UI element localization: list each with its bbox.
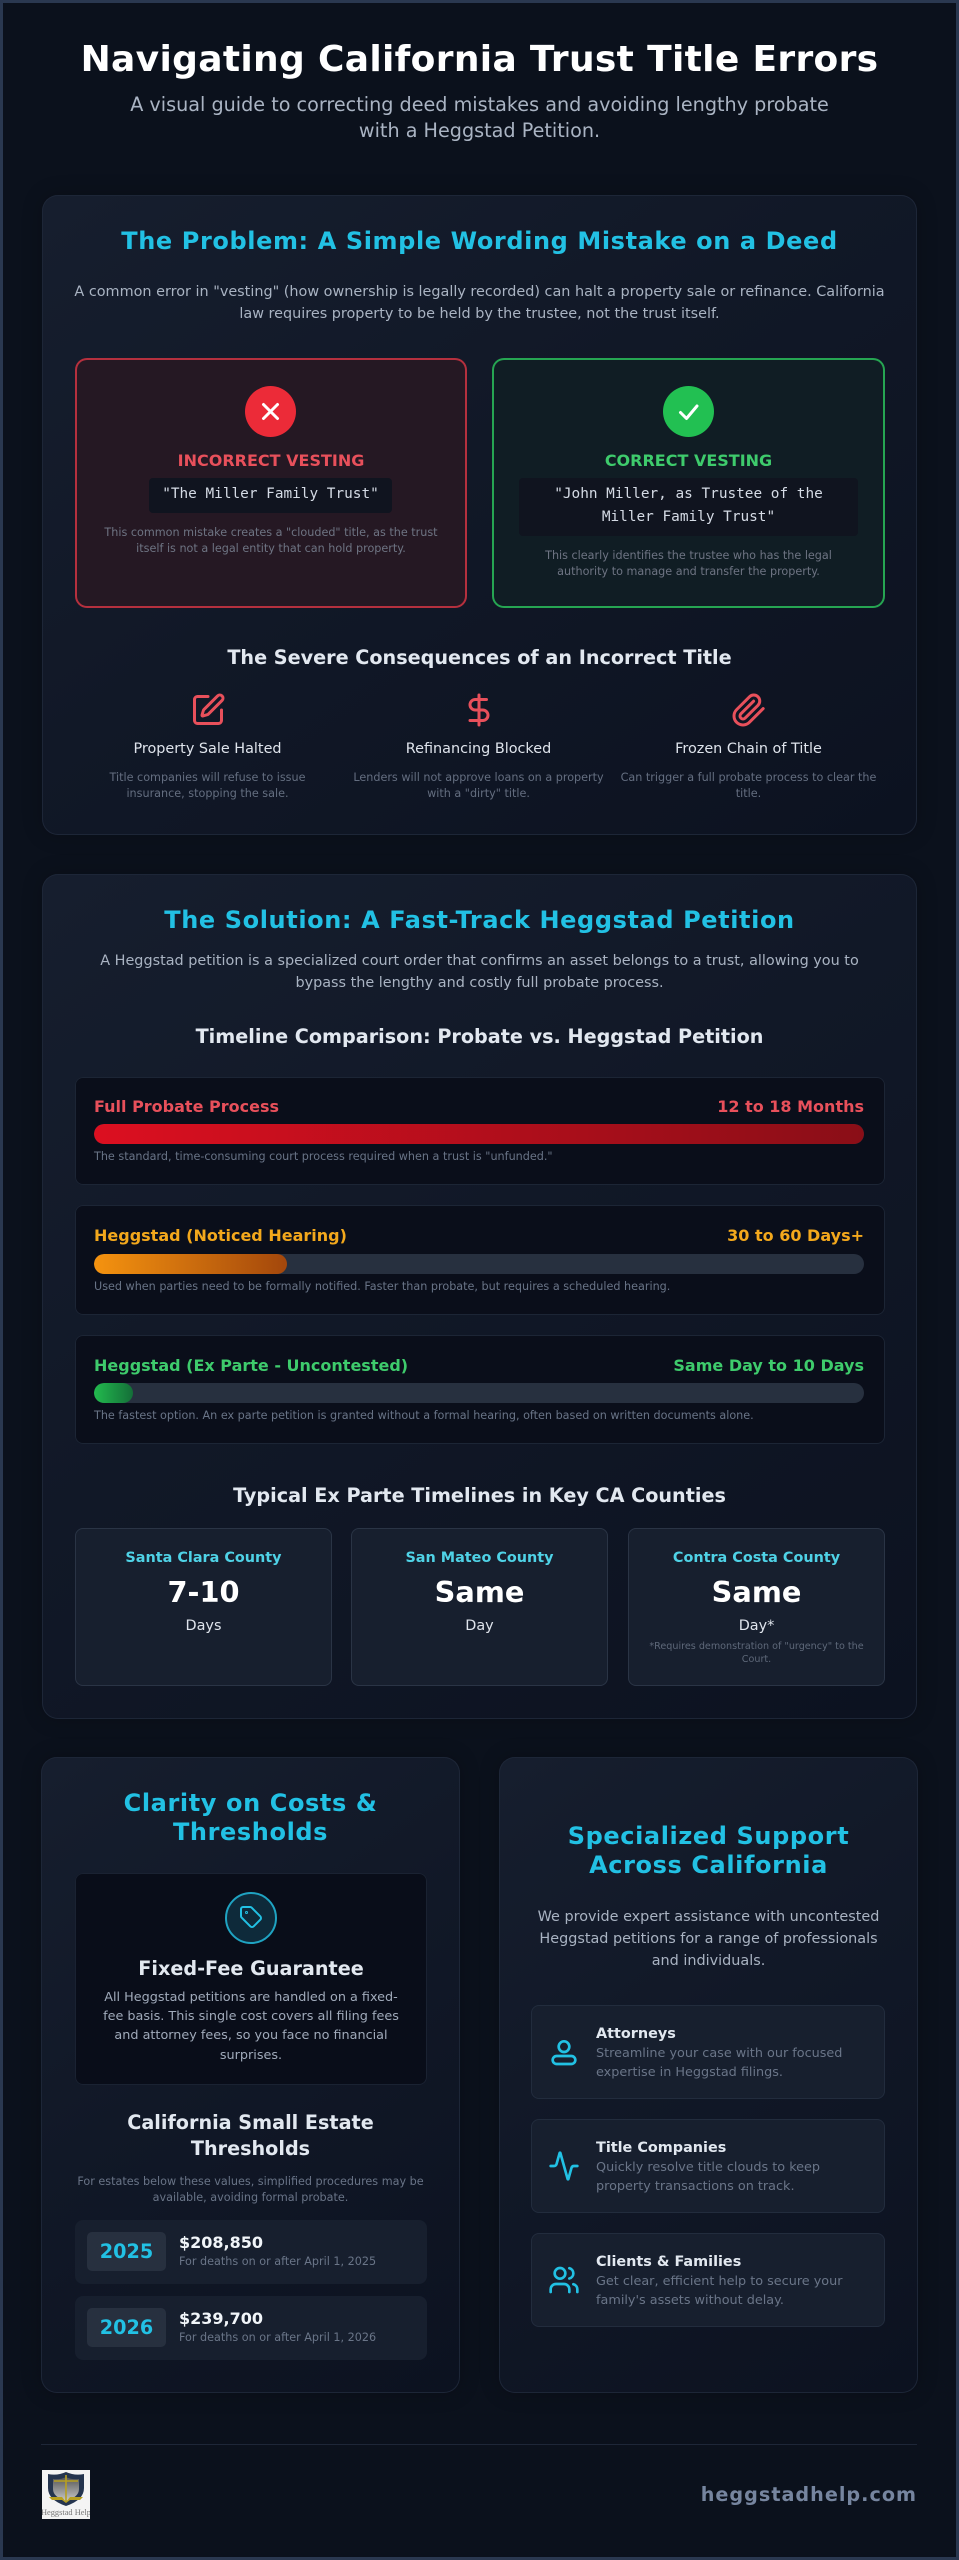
thresholds note: For estates below these values, simplified procedures may be (77, 2175, 424, 2188)
card: incorrect vesting (75, 358, 467, 608)
year badge (87, 2232, 166, 2271)
support description: Heggstad petitions for a range of professionals (539, 1931, 878, 1947)
audience: title companies (531, 2119, 885, 2213)
fixed-fee text: and attorney fees, so you face no financial (114, 2028, 388, 2043)
consequence text: title. (736, 787, 761, 800)
icon: paperclip (732, 694, 765, 726)
support description: We provide expert assistance with uncontested (538, 1909, 879, 1925)
county unit: Day (465, 1618, 494, 1634)
county name: Santa Clara County (125, 1550, 282, 1566)
code: incorrect title (149, 478, 392, 513)
note: The fastest option. An ex parte petition is granted without a formal hearing, often based on written documents alone. (94, 1409, 754, 1422)
audience text: family's assets without delay. (596, 2293, 784, 2308)
code: correct title: "John Miller, as Trustee of the (554, 486, 823, 502)
icon: users (549, 2266, 579, 2294)
consequence text: with a "dirty" title. (427, 787, 530, 800)
audience title: Attorneys (596, 2026, 676, 2042)
heading: consequences: The Severe Consequences of an Incorrect Title (227, 646, 732, 669)
timeline: full probate (75, 1077, 885, 1185)
subtitle: A visual guide to correcting deed mistakes and avoiding lengthy probate (130, 93, 829, 116)
icon: red x (245, 386, 296, 437)
threshold 2025 (75, 2220, 427, 2284)
bar (94, 1124, 864, 1144)
effective date: For deaths on or after April 1, 2026 (179, 2331, 376, 2344)
heading: clarity on costs: Thresholds (173, 1818, 328, 1846)
consequence heading: Property Sale Halted (133, 741, 282, 757)
solution description (100, 953, 859, 991)
label: Heggstad (Noticed Hearing) (94, 1226, 347, 1245)
fixed-fee text: surprises. (220, 2048, 282, 2063)
label: correct vesting: CORRECT VESTING (605, 451, 772, 470)
heading: specialized support (568, 1822, 849, 1879)
support description: and individuals. (652, 1953, 765, 1969)
county: san mateo (351, 1528, 608, 1686)
bar (94, 1383, 864, 1403)
consequence text: Lenders will not approve loans on a property (353, 771, 604, 784)
audience text: Get clear, efficient help to secure your (596, 2274, 843, 2289)
thresholds note: available, avoiding formal probate. (153, 2191, 348, 2204)
icon: pen square (193, 694, 224, 725)
heading: specialized support: Across California (589, 1851, 828, 1879)
panel: the solution (42, 874, 917, 1719)
effective date: For deaths on or after April 1, 2025 (179, 2255, 376, 2268)
correct explanation: authority to manage and transfer the property. (557, 565, 820, 578)
problem description: law requires property to be held by the trustee, not the trust itself. (239, 306, 720, 322)
consequence text: Can trigger a full probate process to clear the (621, 771, 876, 784)
title: Navigating California Trust Title Errors (81, 39, 878, 80)
consequence text (353, 771, 604, 800)
incorrect explanation: itself is not a legal entity that can hold property. (136, 542, 406, 555)
duration: 30 to 60 Days+ (727, 1226, 864, 1245)
audience text: Quickly resolve title clouds to keep (596, 2160, 820, 2175)
label: incorrect vesting: INCORRECT VESTING (178, 451, 364, 470)
fixed-fee heading: Fixed-Fee Guarantee (138, 1957, 364, 1980)
county name: San Mateo County (405, 1550, 554, 1566)
logo (42, 2470, 90, 2519)
heading: the solution: The Solution: A Fast-Track Heggstad Petition (164, 906, 795, 934)
audience text: expertise in Heggstad filings. (596, 2065, 783, 2080)
fixed-fee text: All Heggstad petitions are handled on a fixed- (104, 1990, 398, 2005)
county value: Same (712, 1575, 801, 1609)
icon: green check (663, 386, 714, 437)
audience text: property transactions on track. (596, 2179, 795, 2194)
icon: user (551, 2040, 577, 2066)
heading: small estate thresholds: Thresholds (191, 2137, 310, 2160)
year badge (87, 2308, 166, 2347)
county footnote: *Requires demonstration of "urgency" to the (649, 1641, 864, 1652)
audience text (596, 2160, 820, 2194)
audience text: Streamline your case with our focused (596, 2046, 842, 2061)
panel: specialized support (499, 1757, 918, 2393)
code: correct title: Miller Family Trust" (602, 509, 775, 525)
consequence: frozen chain of title (621, 694, 876, 800)
consequence text: insurance, stopping the sale. (126, 787, 289, 800)
year badge: 2025 (100, 2240, 153, 2263)
county unit: Days (186, 1618, 221, 1634)
audience: clients and families (531, 2233, 885, 2327)
heading: small estate thresholds: California Small Estate (127, 2111, 374, 2134)
heading: clarity on costs: Clarity on Costs & (124, 1789, 377, 1817)
amount: $208,850 (179, 2233, 263, 2252)
county: santa clara (75, 1528, 332, 1686)
duration: 12 to 18 Months (717, 1097, 864, 1116)
consequence text (110, 771, 305, 800)
county footnote: Court. (742, 1654, 771, 1664)
heading: specialized support: Specialized Support (568, 1822, 849, 1850)
incorrect explanation (104, 526, 438, 555)
heading: county timelines: Typical Ex Parte Timelines in Key CA Counties (233, 1484, 726, 1507)
county value: Same (435, 1575, 524, 1609)
consequence heading: Frozen Chain of Title (675, 741, 822, 757)
timeline: ex parte (75, 1335, 885, 1444)
county name: Contra Costa County (673, 1550, 840, 1566)
website: heggstadhelp.com (701, 2483, 917, 2506)
fixed-fee text: fee basis. This single cost covers all filing fees (103, 2009, 399, 2024)
icon: tag (225, 1892, 277, 1944)
card: correct vesting (492, 358, 885, 608)
consequence text: Title companies will refuse to issue (110, 771, 305, 784)
problem description: A common error in "vesting" (how ownership is legally recorded) can halt a property sale or refinance. California (74, 284, 885, 300)
consequence text (621, 771, 876, 800)
correct explanation (545, 549, 832, 578)
year badge: 2026 (100, 2316, 153, 2339)
county footnote (649, 1641, 864, 1664)
consequence: refinancing blocked (353, 694, 604, 800)
note: The standard, time-consuming court process required when a trust is "unfunded." (94, 1150, 553, 1163)
icon: dollar (468, 694, 490, 726)
duration: Same Day to 10 Days (673, 1356, 864, 1375)
code: incorrect title: "The Miller Family Trust" (162, 486, 379, 502)
timeline: noticed hearing (75, 1205, 885, 1315)
heading: small estate thresholds (127, 2111, 374, 2160)
heading: clarity on costs (124, 1789, 377, 1846)
solution description: bypass the lengthy and costly full probate process. (295, 975, 664, 991)
audience title: Clients & Families (596, 2254, 741, 2270)
panel: the problem (42, 195, 917, 835)
heading: the problem: The Problem: A Simple Wording Mistake on a Deed (121, 227, 838, 255)
fixed-fee text (103, 1990, 399, 2063)
icon: activity (549, 2151, 579, 2181)
county unit: Day* (739, 1618, 774, 1634)
audience text (596, 2274, 843, 2308)
label: Heggstad (Ex Parte - Uncontested) (94, 1356, 408, 1375)
county value: 7-10 (167, 1575, 240, 1609)
amount: $239,700 (179, 2309, 263, 2328)
correct explanation: This clearly identifies the trustee who has the legal (545, 549, 832, 562)
consequence: property sale halted (110, 694, 305, 800)
audience: attorneys (531, 2005, 885, 2099)
county: contra costa (628, 1528, 885, 1686)
problem description (74, 284, 885, 322)
incorrect explanation: This common mistake creates a "clouded" title, as the trust (104, 526, 438, 539)
audience text (596, 2046, 842, 2080)
panel: costs and thresholds (41, 1757, 460, 2393)
solution description: A Heggstad petition is a specialized court order that confirms an asset belongs to a trust, allowing you to (100, 953, 859, 969)
code: correct title (519, 478, 858, 536)
threshold 2026 (75, 2296, 427, 2360)
support description (538, 1909, 879, 1969)
consequence heading: Refinancing Blocked (406, 741, 551, 757)
logo shield (48, 2472, 84, 2506)
subtitle: with a Heggstad Petition. (359, 119, 600, 142)
label: Full Probate Process (94, 1097, 279, 1116)
bar (94, 1254, 864, 1274)
note: Used when parties need to be formally notified. Faster than probate, but requires a scheduled hearing. (94, 1280, 670, 1293)
audience title: Title Companies (596, 2140, 726, 2156)
thresholds note (77, 2175, 424, 2204)
heading: timeline comparison: Timeline Comparison: Probate vs. Heggstad Petition (196, 1025, 763, 1048)
fixed-fee box (75, 1873, 427, 2085)
subtitle (130, 93, 829, 142)
